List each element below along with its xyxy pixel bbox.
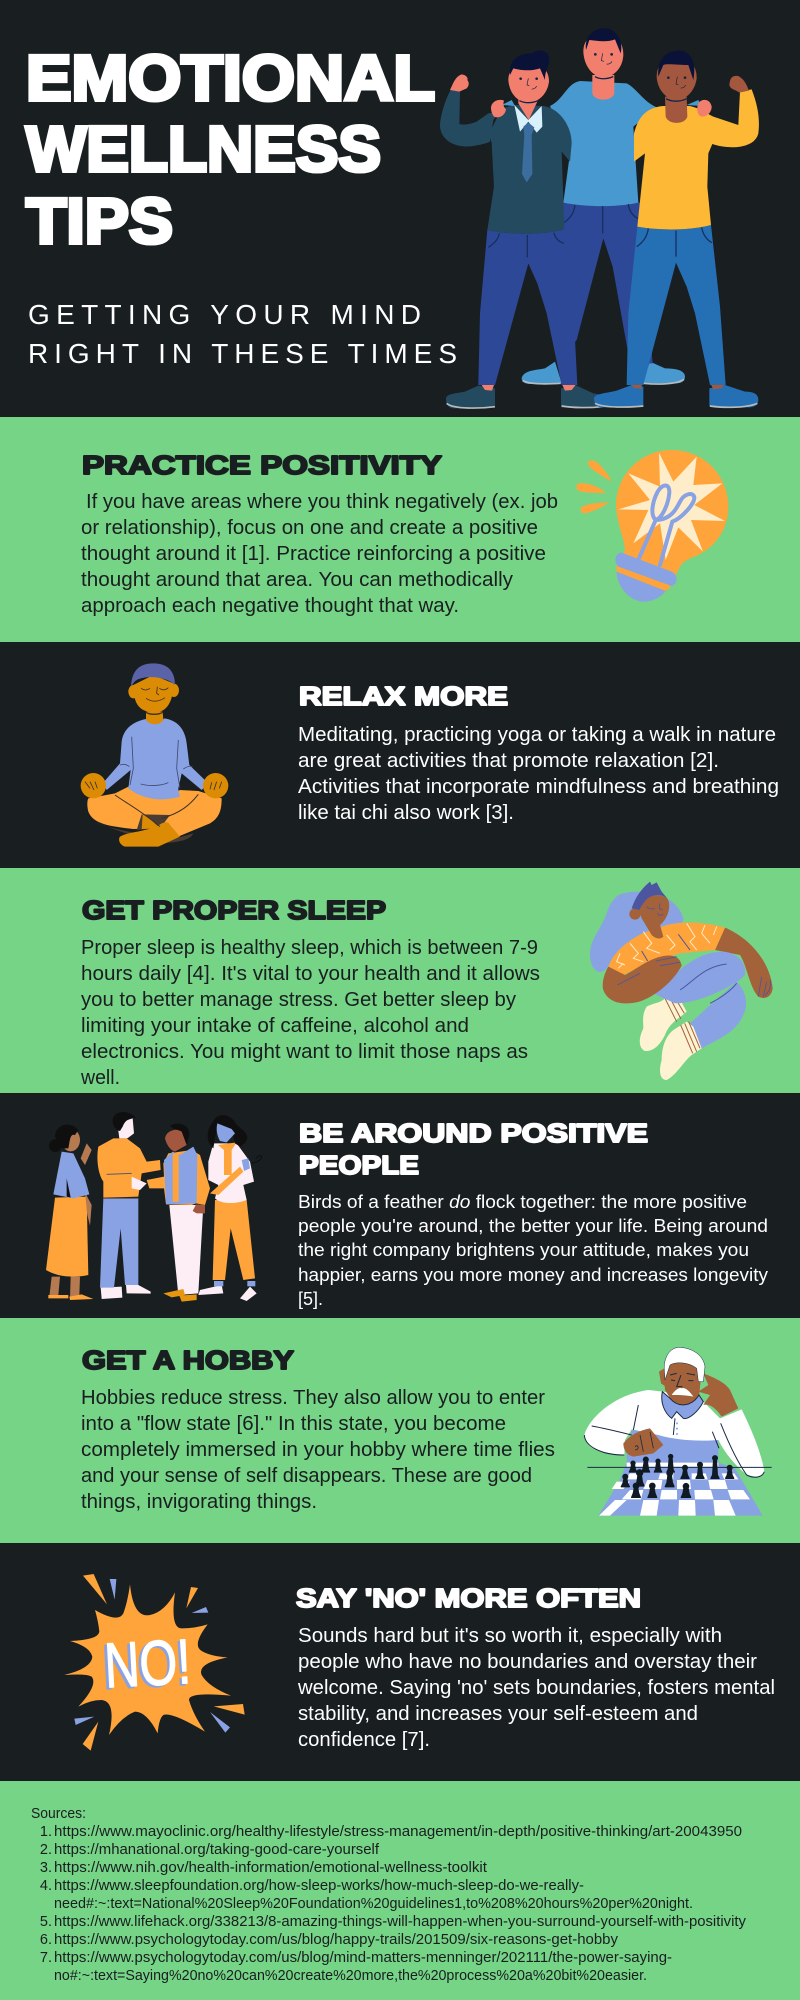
text block: be around positive people: people you're around, the better your life. Being around: [298, 1216, 768, 1236]
text block: get a hobby: Hobbies reduce stress. They also allow you to enter: [81, 1386, 545, 1409]
text block: be around positive people: the right company brightens your attitude, makes you: [298, 1240, 749, 1260]
text block: relax more: like tai chi also work [3].: [298, 801, 514, 824]
sources list: https://www.sleepfoundation.org/how-sleep-works/how-much-sleep-do-we-really-: [54, 1878, 584, 1894]
sources list: https://www.lifehack.org/338213/8-amazing-things-will-happen-when-you-surround-yourself-with-positivity: [54, 1914, 747, 1930]
text block: practice positivity: approach each negative thought that way.: [81, 594, 459, 617]
icon: man playing chess: [584, 1347, 772, 1516]
text block: say no more often: [297, 1624, 775, 1751]
sources list: 2.: [40, 1842, 52, 1858]
icon: no starburst: [64, 1574, 245, 1751]
text block: be around positive people: [298, 1192, 768, 1309]
heading: relax more: RELAX MORE: [299, 681, 508, 711]
sources list: https://www.nih.gov/health-information/emotional-wellness-toolkit: [54, 1860, 487, 1876]
panel: relax more: [0, 642, 800, 868]
text block: practice positivity: thought around it [1]. Practice reinforcing a positive: [81, 542, 546, 565]
sources list: [40, 1824, 747, 1984]
lettering: NO!: NO!: [103, 1627, 192, 1701]
title: EMOTIONAL: [26, 42, 435, 114]
text block: get a hobby: things, invigorating things.: [81, 1490, 317, 1513]
illustration: three friends flexing: [440, 28, 759, 408]
sources list: https://www.psychologytoday.com/us/blog/happy-trails/201509/six-reasons-get-hobby: [54, 1932, 619, 1948]
icon: light bulb: [577, 450, 728, 602]
heading: be around positive people: BE AROUND POSITIVE: [299, 1118, 648, 1148]
text block: practice positivity: If you have areas where you think negatively (ex. job: [86, 490, 558, 513]
figure: woman in orange skirt: [46, 1125, 93, 1300]
text block: say no more often: welcome. Saying 'no' sets boundaries, fosters mental: [297, 1676, 775, 1699]
panel: sources: [0, 1781, 800, 2000]
heading: say no more often: SAY 'NO' MORE OFTEN: [296, 1583, 641, 1613]
lettering: NO!: NO!: [100, 1629, 190, 1703]
icon: four people talking: [46, 1112, 262, 1302]
text block: get proper sleep: hours daily [4]. It's vital to your health and it allows: [81, 962, 540, 985]
title: WELLNESS: [26, 113, 381, 185]
figure: man in vest: [147, 1124, 210, 1302]
figure: left man in teal with tie: [440, 51, 603, 408]
panel: practice positivity: [0, 417, 800, 642]
text block: get proper sleep: electronics. You might want to limit those naps as: [81, 1040, 528, 1063]
subtitle: [28, 299, 457, 369]
text block: get proper sleep: Proper sleep is healthy sleep, which is between 7-9: [81, 936, 538, 959]
panel: get proper sleep: [0, 868, 800, 1093]
panel: hero header: [0, 0, 800, 417]
heading: be around positive people: PEOPLE: [299, 1150, 419, 1180]
sources list: 6.: [40, 1932, 52, 1948]
panel: say no more often: [0, 1543, 800, 1781]
text block: practice positivity: or relationship), focus on one and create a positive: [81, 516, 538, 539]
subtitle: RIGHT IN THESE TIMES: [28, 338, 457, 369]
sources list: 1.: [40, 1824, 52, 1840]
text block: get proper sleep: limiting your intake of caffeine, alcohol and: [81, 1014, 469, 1037]
sources list: 3.: [40, 1860, 52, 1876]
text block: relax more: Meditating, practicing yoga or taking a walk in nature: [298, 723, 776, 746]
text block: say no more often: stability, and increases your self-esteem and: [298, 1702, 698, 1725]
sources list: no#:~:text=Saying%20no%20can%20create%20more,the%20process%20a%20bit%20easier.: [54, 1968, 647, 1984]
heading: be around positive people: [299, 1118, 648, 1180]
sources list: https://www.mayoclinic.org/healthy-lifestyle/stress-management/in-depth/positive-thinking/art-20043950: [54, 1824, 742, 1840]
figure: back man in blue: [522, 28, 685, 384]
text block: relax more: are great activities that promote relaxation [2].: [298, 749, 719, 772]
text block: say no more often: Sounds hard but it's so worth it, especially with: [298, 1624, 722, 1647]
title: [26, 42, 435, 257]
icon: sleeping person: [590, 882, 773, 1080]
heading: practice positivity: PRACTICE POSITIVITY: [82, 450, 442, 480]
heading: get a hobby: GET A HOBBY: [82, 1345, 294, 1375]
text block: say no more often: people who have no boundaries and overstay their: [298, 1650, 757, 1673]
icon: meditating man: [81, 663, 228, 847]
sources heading: Sources:: [31, 1806, 86, 1822]
panel: be around positive people: [0, 1093, 800, 1318]
text block: get a hobby: [81, 1386, 555, 1513]
sources list: https://mhanational.org/taking-good-care-yourself: [54, 1842, 380, 1858]
subtitle: GETTING YOUR MIND: [28, 299, 421, 330]
sources list: 4.: [40, 1878, 52, 1894]
sources list: 5.: [40, 1914, 52, 1930]
text block: get a hobby: and your sense of self disappears. These are good: [81, 1464, 532, 1487]
text block: be around positive people: Birds of a feather do flock together: the more positive: [298, 1192, 747, 1212]
panel: get a hobby: [0, 1318, 800, 1543]
title: TIPS: [26, 185, 173, 257]
text block: get proper sleep: well.: [80, 1066, 120, 1089]
text block: practice positivity: thought around that area. You can methodically: [81, 568, 514, 591]
text block: practice positivity: [81, 490, 558, 617]
text block: be around positive people: happier, earns you more money and increases longevity: [298, 1265, 768, 1285]
text block: relax more: [298, 723, 779, 824]
sources list: https://www.psychologytoday.com/us/blog/mind-matters-menninger/202111/the-power-saying-: [54, 1950, 672, 1966]
figure: man in orange sweater: [97, 1112, 161, 1299]
text block: get a hobby: into a "flow state [6]." In this state, you become: [81, 1412, 506, 1435]
figure: right man in yellow: [594, 51, 759, 407]
sources list: need#:~:text=National%20Sleep%20Foundation%20guidelines1,to%208%20hours%20per%20night.: [54, 1896, 693, 1912]
text block: get proper sleep: you to better manage stress. Get better sleep by: [81, 988, 517, 1011]
text block: relax more: Activities that incorporate mindfulness and breathing: [298, 775, 779, 798]
text block: be around positive people: [5].: [298, 1289, 323, 1309]
text block: get a hobby: completely immersed in your hobby where time flies: [81, 1438, 555, 1461]
text block: get proper sleep: [80, 936, 540, 1089]
text block: say no more often: confidence [7].: [298, 1728, 430, 1751]
heading: get proper sleep: GET PROPER SLEEP: [82, 895, 386, 925]
figure: woman with umbrella: [198, 1115, 262, 1301]
sources list: 7.: [40, 1950, 52, 1966]
